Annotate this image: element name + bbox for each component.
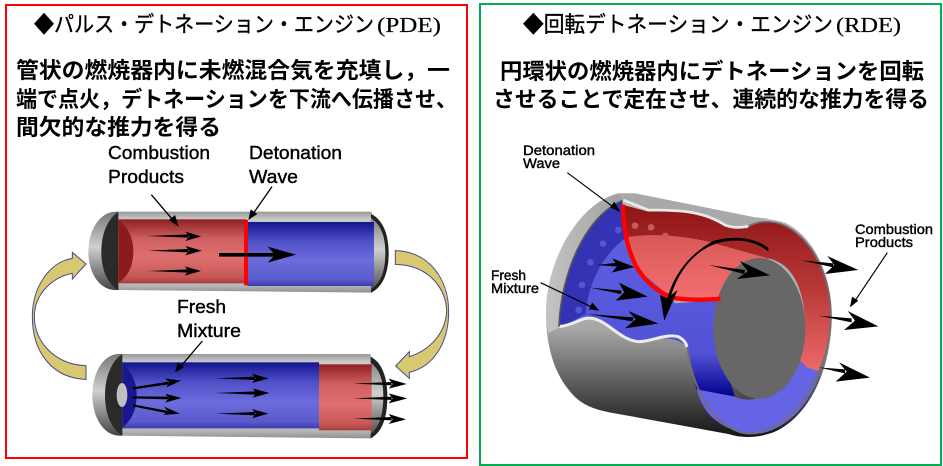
- label: Detonation Wave: Wave: [249, 167, 298, 187]
- heading: RDE: (RDE): [836, 13, 901, 37]
- diagram: RDE cutaway: [541, 173, 887, 437]
- holes in red wall: [632, 222, 669, 239]
- label: Fresh Mixture: Fresh: [491, 267, 526, 283]
- text block: PDE description: 管状の燃焼器内に未燃混合気を充填し，一: [16, 58, 450, 83]
- combustion zone: outer red wall: [623, 205, 831, 372]
- label: Detonation Wave: Detonation: [249, 143, 342, 163]
- panel: RDE: [480, 4, 941, 465]
- label: Detonation Wave: [523, 142, 595, 171]
- detonation wave front: [244, 220, 248, 285]
- outer shell: [546, 193, 832, 437]
- diagram: PDE tubes: [32, 187, 449, 438]
- text block: RDE description: させることで定在させ、連続的な推力を得る: [493, 87, 929, 112]
- heading: PDE: ◆パルス・デトネーション・エンジン: [34, 12, 374, 37]
- arrow: rotation: [660, 238, 768, 321]
- label: Fresh Mixture: [491, 267, 539, 296]
- text block: RDE description: [493, 59, 929, 112]
- leader lines: [151, 187, 272, 372]
- label: Combustion Products: [855, 221, 933, 250]
- arrows: fresh mixture flow: [587, 258, 658, 328]
- text block: PDE description: 間欠的な推力を得る: [16, 115, 221, 140]
- combustion zone: inner lit wall: [625, 235, 768, 301]
- text block: RDE description: 円環状の燃焼器内にデトネーションを回転: [500, 59, 924, 84]
- lower annulus: blue: [697, 359, 820, 434]
- arrow: cycle right: [395, 251, 449, 378]
- centre body: [713, 258, 805, 399]
- cavity: blue: [559, 201, 735, 397]
- label: Fresh Mixture: Fresh: [177, 297, 226, 317]
- text block: PDE description: 端で点火，デトネーションを下流へ伝播させ、: [16, 87, 457, 112]
- tube: top, detonation propagating: [88, 212, 389, 293]
- arrow: cycle left: [32, 252, 86, 379]
- arrows: exhaust: [708, 256, 878, 382]
- tube: bottom, fresh mixture filling: [92, 354, 407, 438]
- back wall: dark blue: [559, 201, 625, 327]
- label: Combustion Products: [108, 143, 210, 187]
- label: Detonation Wave: Detonation: [523, 142, 595, 158]
- text block: PDE description: [16, 58, 457, 140]
- label: Combustion Products: Combustion: [855, 221, 933, 237]
- label: Combustion Products: Products: [108, 167, 184, 187]
- label: Detonation Wave: Wave: [523, 155, 560, 171]
- shell cut edge: [559, 318, 687, 347]
- leader lines: [541, 173, 887, 311]
- panel: PDE: [6, 5, 467, 458]
- rim: [546, 193, 635, 333]
- detonation wave front: [623, 205, 720, 300]
- heading: RDE: ◆回転デトネーション・エンジン: [523, 12, 833, 37]
- label: Fresh Mixture: Mixture: [177, 321, 241, 341]
- arrow: wave direction: [219, 247, 296, 263]
- label: Combustion Products: Products: [855, 234, 913, 250]
- label: Fresh Mixture: [177, 297, 241, 341]
- shell front rim edge: [687, 222, 831, 434]
- label: Detonation Wave: [249, 143, 342, 187]
- label: Fresh Mixture: Mixture: [491, 280, 539, 296]
- heading: PDE: (PDE): [377, 13, 441, 37]
- label: Combustion Products: Combustion: [108, 143, 210, 163]
- arrows: exhaust: [353, 379, 407, 424]
- injector holes: [575, 227, 622, 313]
- arrows: fresh mixture flow: [133, 374, 269, 418]
- arrows: combustion products flow: [147, 232, 202, 276]
